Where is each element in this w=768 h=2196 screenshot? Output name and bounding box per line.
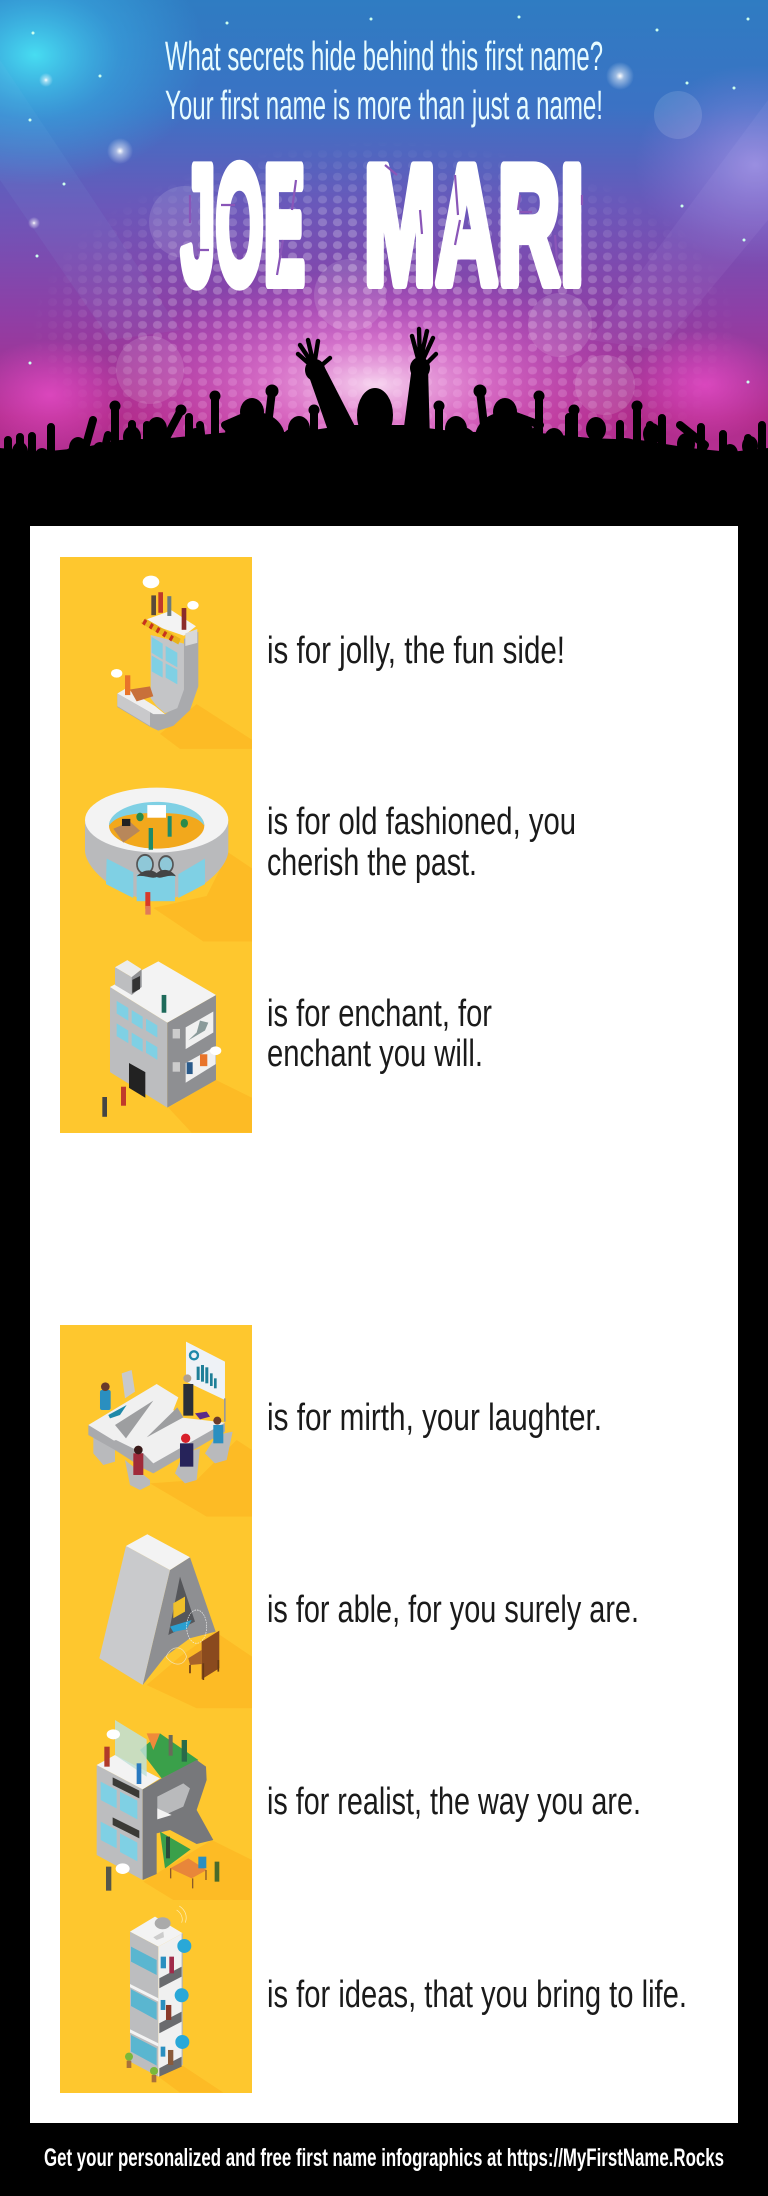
icon: letter I tower (125, 1906, 223, 2093)
letter E text: enchant you will. (267, 1033, 483, 1075)
letter O text (267, 801, 576, 884)
title: JOE MARI: JOE (181, 131, 305, 319)
illustration strip: J O E (60, 557, 252, 1133)
letter O text: is for old fashioned, you (267, 801, 576, 843)
letter E text: is for enchant, for (267, 993, 492, 1035)
icon: letter M meeting table (88, 1342, 252, 1517)
letter O text: cherish the past. (267, 842, 477, 884)
heads (69, 437, 87, 459)
icon: letter R building (97, 1720, 252, 1900)
letter E text (267, 993, 492, 1075)
icon: letter O building (85, 788, 252, 942)
body masses (225, 412, 285, 464)
icon: letter A building (99, 1534, 252, 1708)
white content panel (30, 526, 738, 2123)
central figure (298, 329, 436, 450)
illustration strip: M A R I (60, 1325, 252, 2093)
icon: letter J building (111, 576, 252, 749)
letter M text: is for mirth, your laughter. (267, 1397, 602, 1439)
icon: letter E building (102, 960, 252, 1133)
side arms (8, 391, 762, 470)
hero background with lights and dot grid (0, 0, 768, 500)
letter J text: is for jolly, the fun side! (267, 630, 565, 672)
crowd silhouette (0, 329, 768, 526)
letter R text: is for realist, the way you are. (267, 1781, 641, 1823)
letter A text: is for able, for you surely are. (267, 1589, 639, 1631)
